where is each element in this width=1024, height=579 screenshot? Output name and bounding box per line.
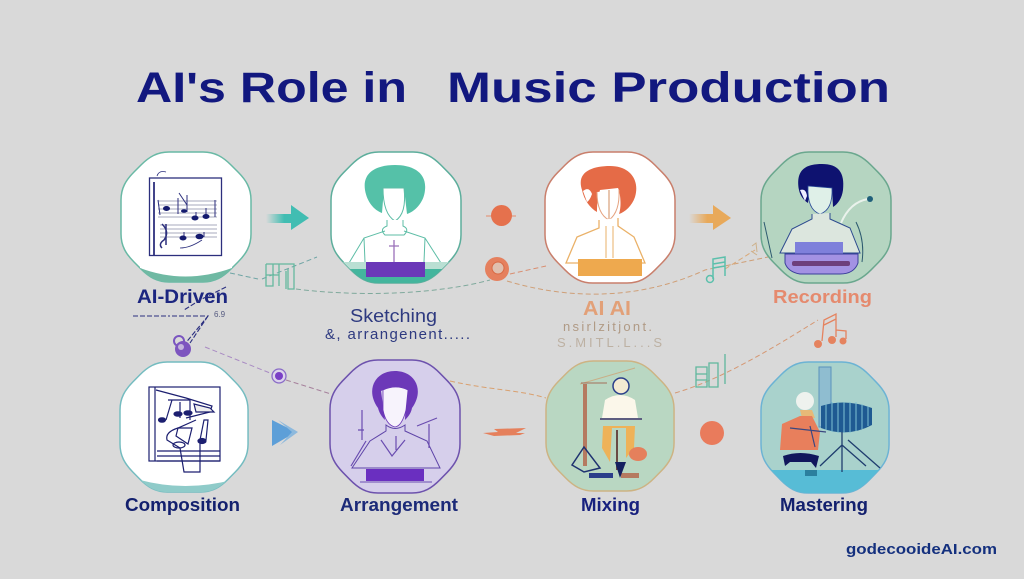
icon: music bars (green) [696,354,725,387]
node: orange ring [485,257,509,281]
watermark: godecooideAI.com [846,541,997,558]
label: Recording: Recording [773,286,872,307]
arrow: amber [689,205,731,230]
infographic canvas [119,71,996,557]
panel: sketching person [331,152,461,285]
panel: AI-driven sheet music [121,152,251,285]
icon: purple-haired conductor [351,371,440,482]
arrow: blue chevron [272,420,298,446]
icon: music bars (teal) [266,264,294,289]
icon: hand holding notes [149,387,220,472]
icon: engineer with headphones on stool [572,368,647,478]
node: purple ring [272,369,286,383]
icon: person at keyboard [764,164,873,274]
title [136,64,890,112]
label: Composition: Composition [125,495,240,515]
label: AI AI [557,298,662,350]
panel: mixing [546,361,674,491]
icon: teal-haired person [343,165,449,283]
icon: orange-haired person [566,166,645,276]
arrow: teal [266,205,309,230]
label: Mixing: Mixing [581,494,640,515]
panel: AI orange person [545,152,675,283]
panel: mastering [761,362,889,495]
label: Arrangement: Arrangement [340,495,458,515]
panel: recording person [761,152,891,283]
connector: dashed flow lines [205,250,818,398]
icon: music note (teal) [706,257,725,282]
icon: sheet music [150,172,222,256]
node: orange pin [486,205,516,226]
title: Music Production [447,64,890,112]
icon: small note cluster [751,243,757,255]
label: Sketching and arrangement: Sketching [350,306,437,326]
label: Sketching and arrangement: &, arrangenent..... [325,326,470,343]
label: Sketching and arrangement [325,306,470,343]
icon: orange spark [483,428,526,436]
label: Mastering: Mastering [780,494,868,515]
label: AI AI: S.MITL.L...S [557,335,662,350]
decoration: purple scissors-like marker: 6.9 [214,310,226,319]
icon: engineer at mixing tower [770,367,880,495]
title: AI's Role in [136,64,407,112]
icon: orange music notes [814,314,846,348]
panel: arrangement [330,360,460,493]
label: AI-Driven: AI-Driven [137,287,228,308]
panel: composition [120,362,248,495]
label: AI AI: nsirlzitjont. [563,319,652,334]
decoration: purple scissors-like marker [133,287,226,357]
label: AI AI: AI AI [583,298,631,320]
node: orange dot [700,421,724,445]
